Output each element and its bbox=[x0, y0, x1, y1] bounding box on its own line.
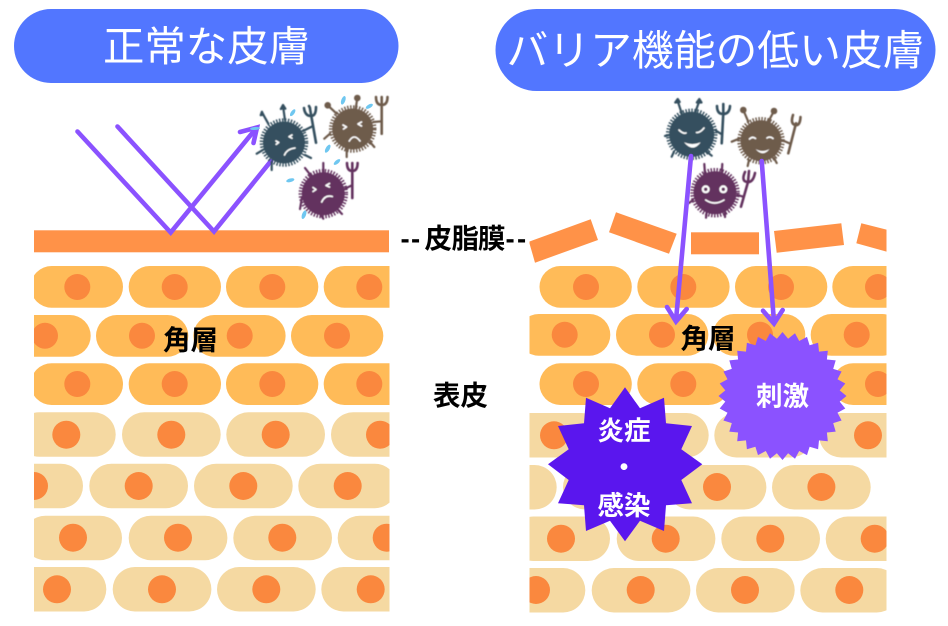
burst: inflammation and infection: 感染 bbox=[598, 491, 650, 521]
arrows: penetrating the skin bbox=[667, 156, 783, 324]
burst: inflammation and infection bbox=[548, 387, 702, 541]
epidermis cells, normal skin bbox=[34, 412, 390, 612]
epidermis cells, low barrier skin bbox=[530, 413, 886, 612]
label: stratum corneum, right: 角層 bbox=[680, 323, 736, 354]
label: epidermis: 表皮 bbox=[433, 380, 488, 411]
burst: irritation bbox=[718, 332, 846, 460]
burst: inflammation and infection: ・ bbox=[611, 453, 637, 483]
label: stratum corneum, left: 角層 bbox=[163, 324, 218, 356]
panel: normal skin cells bbox=[34, 266, 390, 612]
title: normal skin: 正常な皮膚 bbox=[103, 23, 310, 70]
panel: low barrier skin cells bbox=[530, 212, 886, 612]
germ: brown, repelled bbox=[324, 96, 388, 157]
label: sebum membrane: --皮脂膜-- bbox=[400, 223, 526, 254]
sweat drops bbox=[250, 95, 374, 220]
title: normal skin bbox=[14, 9, 398, 83]
title: low barrier skin bbox=[496, 9, 936, 91]
burst: inflammation and infection: 炎症 bbox=[598, 416, 650, 446]
germ: purple, repelled bbox=[300, 163, 358, 219]
germ: teal, repelled bbox=[257, 105, 316, 170]
title: low barrier skin: バリア機能の低い皮膚 bbox=[506, 27, 924, 74]
stratum corneum cells, low barrier skin bbox=[530, 266, 886, 405]
germ: purple, invading bbox=[689, 164, 755, 218]
arrows: reflected off membrane bbox=[78, 126, 271, 232]
burst: irritation: 刺激 bbox=[756, 382, 810, 412]
germ: brown, invading bbox=[732, 108, 800, 166]
sebum membrane, broken bbox=[529, 212, 887, 263]
sebum membrane, intact bbox=[34, 230, 389, 252]
stratum corneum cells, normal skin bbox=[34, 266, 390, 405]
germ: teal, invading bbox=[665, 99, 730, 158]
